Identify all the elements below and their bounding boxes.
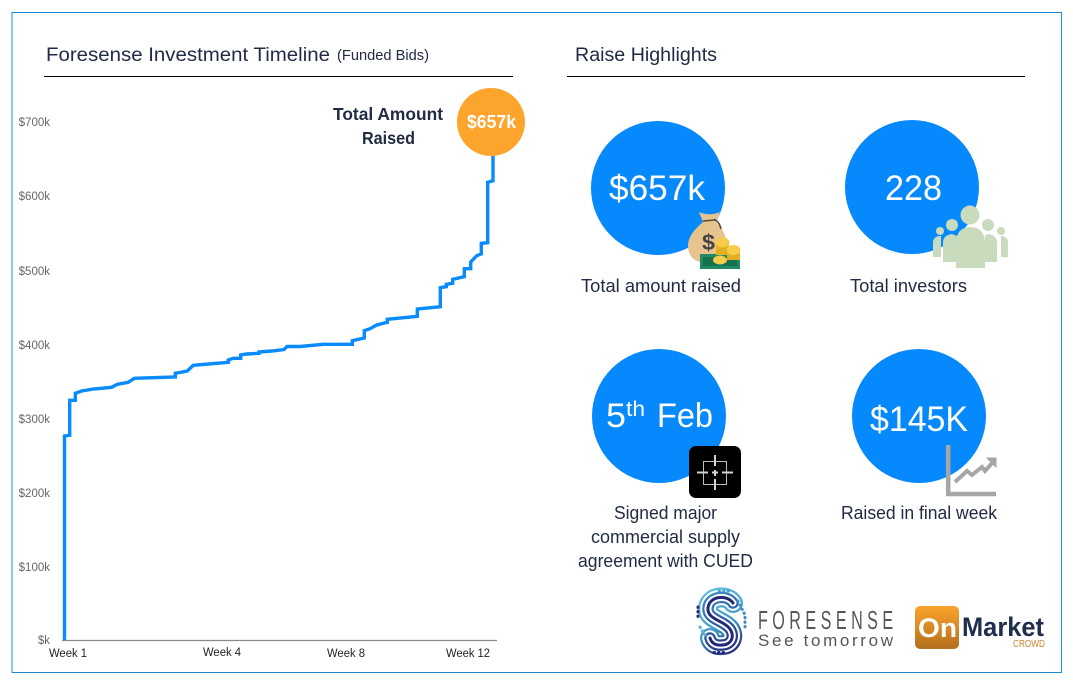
highlight: total amount raised: Total amount raised xyxy=(581,276,741,296)
logo: OnMarket Crowd: Market xyxy=(962,612,1044,642)
y axis labels: $300k xyxy=(19,414,50,426)
icon: group of people xyxy=(933,206,1008,268)
y axis labels: $100k xyxy=(19,562,50,574)
y axis labels: $400k xyxy=(19,340,50,352)
callout: total amount raised: Raised xyxy=(362,128,415,148)
highlight: total amount raised xyxy=(581,121,741,296)
highlight: total investors xyxy=(845,120,1008,296)
y axis labels: $200k xyxy=(19,488,50,500)
x axis labels: Week 8 xyxy=(327,648,365,660)
panel: raise highlights xyxy=(567,45,1025,571)
heading: investment timeline: (Funded Bids) xyxy=(337,47,429,64)
line chart: cumulative funded bids xyxy=(64,156,493,640)
y axis labels: $500k xyxy=(19,266,50,278)
icon: money bag: $ xyxy=(702,230,715,255)
highlight: total investors: 228 xyxy=(885,169,942,208)
highlight: supply agreement date xyxy=(578,349,753,571)
logo: Foresense xyxy=(698,591,894,652)
highlight: raised in final week xyxy=(841,349,998,523)
highlight: supply agreement date: Signed major xyxy=(614,503,717,523)
x axis xyxy=(62,640,497,642)
y axis labels: $700k xyxy=(19,117,50,129)
heading: investment timeline xyxy=(46,45,429,66)
y axis labels: $600k xyxy=(19,191,50,203)
highlight: raised in final week: $145K xyxy=(870,400,968,439)
x axis labels: Week 1 xyxy=(49,648,87,660)
highlight: supply agreement date: agreement with CUED xyxy=(578,551,753,571)
heading: investment timeline: Foresense Investment Timeline xyxy=(46,45,330,66)
highlight: supply agreement date: th xyxy=(626,398,645,421)
heading: raise highlights: Raise Highlights xyxy=(575,45,717,66)
y axis labels: $k xyxy=(38,635,50,647)
x axis labels: Week 4 xyxy=(203,647,242,659)
logo: OnMarket Crowd xyxy=(915,606,1045,650)
logo: OnMarket Crowd: On xyxy=(918,613,957,643)
highlight: supply agreement date: commercial supply xyxy=(591,527,740,547)
icon: money bag xyxy=(688,212,740,269)
y axis labels xyxy=(19,117,50,647)
x axis labels xyxy=(49,647,490,660)
highlight: supply agreement date: 5 xyxy=(606,397,626,435)
icon: growth chart xyxy=(948,445,996,494)
callout: total amount raised: $657k xyxy=(467,111,517,132)
logo: OnMarket Crowd: CROWD xyxy=(1013,639,1045,650)
x axis labels: Week 12 xyxy=(446,648,490,660)
highlight: raised in final week: Raised in final week xyxy=(841,503,998,523)
icon: fingerprint S mark xyxy=(698,591,745,652)
icon: crosshair xyxy=(689,446,741,498)
logo: Foresense: FORESENSE xyxy=(758,605,893,635)
callout: total amount raised: Total Amount xyxy=(333,104,443,124)
logo: Foresense: See tomorrow xyxy=(758,631,894,650)
callout: total amount raised xyxy=(333,88,525,156)
highlight: total amount raised: $657k xyxy=(609,169,705,208)
highlight: total investors: Total investors xyxy=(850,276,967,296)
highlight: supply agreement date: Feb xyxy=(657,397,713,435)
panel: investment timeline xyxy=(19,45,525,660)
